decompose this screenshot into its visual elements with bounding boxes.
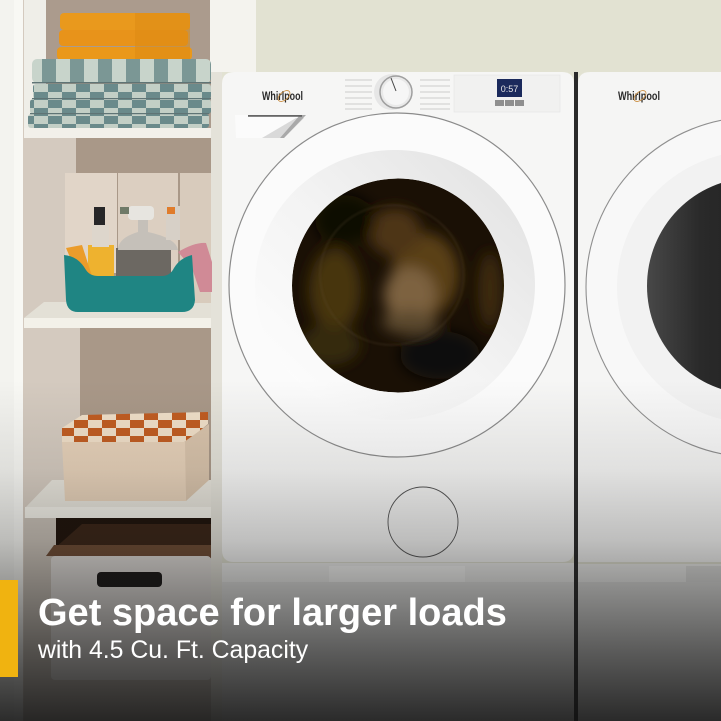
brand logo left	[262, 88, 303, 104]
display	[495, 79, 524, 106]
door latch circle	[388, 487, 458, 557]
window	[292, 178, 504, 392]
beige bin	[62, 424, 209, 501]
orange towels	[57, 13, 192, 60]
detergent drawer	[235, 115, 306, 138]
display: 0:57	[501, 84, 518, 94]
washer: right unit	[578, 72, 721, 721]
subheading: with 4.5 Cu. Ft. Capacity	[37, 637, 309, 664]
brand logo left: Whirlpool	[262, 89, 303, 103]
bottles	[66, 206, 180, 278]
shelf lower	[25, 480, 211, 518]
orange checkered towel	[62, 412, 208, 442]
panel: shelving unit	[0, 0, 256, 721]
dial	[374, 74, 412, 110]
bottom dark gradient	[0, 380, 721, 721]
shelf middle	[24, 302, 211, 328]
accent bar	[0, 580, 18, 677]
pink cloth	[178, 243, 212, 292]
control panel	[345, 74, 560, 112]
door	[229, 113, 565, 457]
teal basket	[64, 255, 195, 312]
pedestal	[222, 563, 574, 721]
paper rolls	[65, 173, 211, 303]
storage box	[46, 524, 211, 680]
shelf top	[24, 128, 211, 138]
gap between washers	[574, 72, 578, 721]
brand logo right: Whirlpool	[618, 89, 660, 103]
washer: left unit	[222, 72, 574, 562]
heading: Get space for larger loads	[38, 592, 507, 634]
striped blue-green towels	[28, 59, 211, 128]
